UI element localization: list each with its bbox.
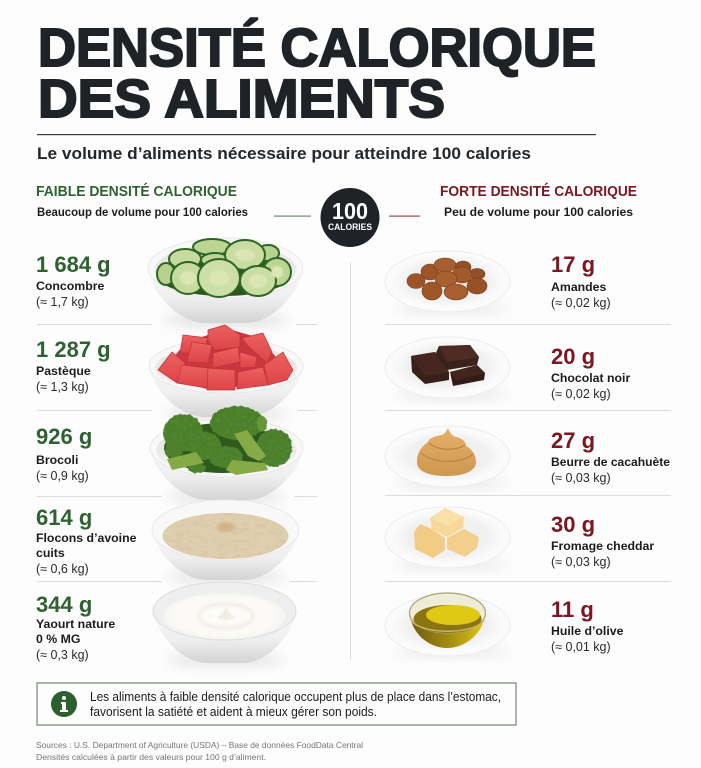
heading: high density <box>440 183 637 219</box>
icon: broccoli bowl <box>150 406 303 503</box>
icon: peanut butter plate <box>385 426 510 487</box>
title: DES ALIMENTS <box>38 69 445 129</box>
sources <box>36 740 363 762</box>
item: olive oil: Huile d’olive <box>551 624 624 638</box>
item: dark chocolate: (≈ 0,02 kg) <box>551 387 611 401</box>
item: cheddar: Fromage cheddar <box>551 539 654 553</box>
callout: Les aliments à faible densité calorique occupent plus de place dans l’estomac, <box>90 690 501 704</box>
item: olive oil <box>551 597 624 654</box>
icon: olive oil in glass bowl <box>385 593 510 656</box>
item: watermelon: Pastèque <box>36 364 91 378</box>
subtitle: Le volume d’aliments nécessaire pour atteindre 100 calories <box>37 144 531 163</box>
item: almonds: (≈ 0,02 kg) <box>551 296 611 310</box>
callout <box>37 683 516 725</box>
item: cheddar: (≈ 0,03 kg) <box>551 555 611 569</box>
item: broccoli: 926 g <box>36 424 92 449</box>
item: broccoli: (≈ 0,9 kg) <box>36 469 89 483</box>
title <box>38 18 596 129</box>
item: peanut butter: Beurre de cacahuète <box>551 455 670 469</box>
heading: high density: Peu de volume pour 100 calories <box>444 205 633 219</box>
heading: low density <box>36 183 248 219</box>
item: cheddar <box>551 512 654 569</box>
badge: 100 calories: 100 <box>332 198 368 224</box>
item: cheddar: 30 g <box>551 512 595 537</box>
icon: cucumber bowl <box>148 238 303 327</box>
item: cucumber: Concombre <box>36 279 104 293</box>
item: cucumber <box>36 252 111 309</box>
heading: high density: FORTE DENSITÉ CALORIQUE <box>440 183 637 200</box>
item: oatmeal <box>36 505 137 576</box>
item: oatmeal: cuits <box>36 546 65 560</box>
icon: oatmeal bowl <box>152 500 299 583</box>
item: oatmeal: (≈ 0,6 kg) <box>36 562 89 576</box>
sources: Sources : U.S. Department of Agriculture (USDA) – Base de données FoodData Central <box>36 740 363 750</box>
callout: favorisent la satiété et aident à mieux gérer son poids. <box>90 705 377 719</box>
icon: info <box>51 691 77 717</box>
item: almonds: Amandes <box>551 280 607 294</box>
item: yogurt: 344 g <box>36 592 92 617</box>
item: olive oil: 11 g <box>551 597 594 622</box>
item: oatmeal: Flocons d’avoine <box>36 531 137 545</box>
item: broccoli: Brocoli <box>36 453 78 467</box>
icon: almonds plate <box>385 251 510 312</box>
title: DENSITÉ CALORIQUE <box>38 18 596 78</box>
item: dark chocolate: Chocolat noir <box>551 371 630 385</box>
icon: dark chocolate plate <box>385 337 510 398</box>
icon: yogurt bowl <box>153 582 296 666</box>
item: cucumber: 1 684 g <box>36 252 111 277</box>
item: yogurt <box>36 592 115 662</box>
heading: low density: FAIBLE DENSITÉ CALORIQUE <box>36 183 237 200</box>
icon: cheddar plate <box>385 507 510 568</box>
item: watermelon: (≈ 1,3 kg) <box>36 380 89 394</box>
item: olive oil: (≈ 0,01 kg) <box>551 640 611 654</box>
item: watermelon: 1 287 g <box>36 337 111 362</box>
item: broccoli <box>36 424 92 483</box>
sources: Densités calculées à partir des valeurs pour 100 g d’aliment. <box>36 752 266 762</box>
item: yogurt: Yaourt nature <box>36 617 115 631</box>
item: cucumber: (≈ 1,7 kg) <box>36 295 89 309</box>
icon: watermelon bowl <box>149 325 303 420</box>
item: almonds <box>551 252 611 310</box>
item: dark chocolate <box>551 344 630 401</box>
item: peanut butter <box>551 428 670 485</box>
item: yogurt: (≈ 0,3 kg) <box>36 648 89 662</box>
badge: 100 calories: CALORIES <box>328 222 372 233</box>
item: peanut butter: (≈ 0,03 kg) <box>551 471 611 485</box>
item: watermelon <box>36 337 111 394</box>
item: yogurt: 0 % MG <box>36 632 80 646</box>
item: almonds: 17 g <box>551 252 595 277</box>
badge: 100 calories <box>274 188 420 247</box>
dividers <box>37 262 671 660</box>
item: peanut butter: 27 g <box>551 428 595 453</box>
item: dark chocolate: 20 g <box>551 344 595 369</box>
heading: low density: Beaucoup de volume pour 100 calories <box>37 205 248 219</box>
item: oatmeal: 614 g <box>36 505 92 530</box>
